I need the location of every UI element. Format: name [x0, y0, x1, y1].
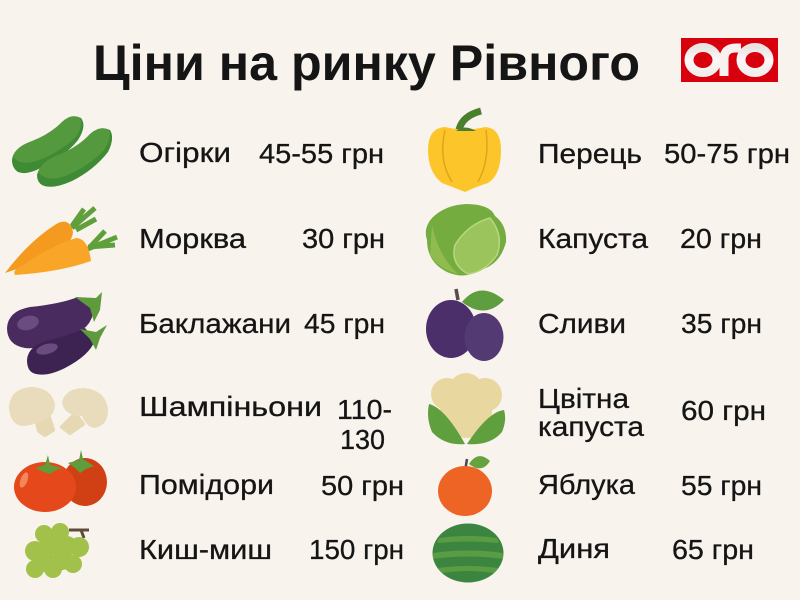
icon: yellow pepper: [428, 111, 501, 192]
icon: apple: [438, 456, 492, 516]
icon: tomatoes: [14, 450, 107, 512]
row: plums: Сливи: [538, 308, 626, 339]
logo: OGO: [681, 38, 778, 82]
row: carrot: Морква: [139, 223, 246, 254]
icon: plums: [426, 289, 504, 361]
row: eggplant: Баклажани: [139, 308, 291, 339]
row: cabbage: 20 грн: [680, 223, 762, 254]
row: tomatoes: [139, 469, 404, 501]
row: cucumbers: [139, 137, 384, 169]
icon: cauliflower: [428, 373, 505, 444]
icon: cucumbers: [12, 116, 112, 187]
row: apples: Яблука: [538, 469, 635, 500]
row: cauliflower: 60 грн: [681, 395, 766, 426]
row: cucumbers: Огірки: [139, 137, 231, 168]
row: plums: [538, 308, 762, 339]
row: cabbage: [538, 223, 762, 254]
row: tomatoes: 50 грн: [321, 470, 404, 501]
row: melon: 65 грн: [672, 534, 754, 565]
row: melon: Диня: [538, 533, 610, 564]
icon: cabbage: [426, 204, 506, 276]
row: carrot: [139, 223, 385, 254]
row: apples: 55 грн: [681, 470, 762, 501]
row: carrot: 30 грн: [302, 223, 385, 254]
icon: grapes: [25, 523, 89, 578]
row: melon: [538, 533, 754, 565]
row: mushrooms: [139, 391, 392, 455]
row: mushrooms: 110-: [337, 394, 392, 425]
row: grapes: Киш-миш: [139, 534, 272, 565]
row: apples: [538, 469, 762, 501]
row: pepper: 50-75 грн: [664, 138, 790, 169]
row: pepper: Перець: [538, 138, 642, 169]
row: eggplant: 45 грн: [304, 308, 385, 339]
row: mushrooms: Шампіньони: [139, 391, 322, 422]
row: cucumbers: 45-55 грн: [259, 138, 384, 169]
icon: carrots: [5, 208, 117, 275]
row: tomatoes: Помідори: [139, 469, 274, 500]
icon: watermelon: [432, 524, 504, 582]
row: cauliflower: Цвітна: [538, 383, 629, 414]
icon: mushrooms: [9, 387, 108, 435]
row: mushrooms: 130: [340, 424, 385, 455]
row: pepper: [538, 138, 790, 169]
title: Ціни на ринку Рівного: [93, 35, 640, 91]
row: cauliflower: [538, 383, 766, 442]
row: cauliflower: капуста: [538, 411, 644, 442]
row: grapes: [139, 534, 404, 565]
row: grapes: 150 грн: [309, 534, 404, 565]
row: cabbage: Капуста: [538, 223, 648, 254]
icon: eggplants: [7, 292, 107, 375]
row: plums: 35 грн: [681, 308, 762, 339]
row: eggplant: [139, 308, 385, 339]
